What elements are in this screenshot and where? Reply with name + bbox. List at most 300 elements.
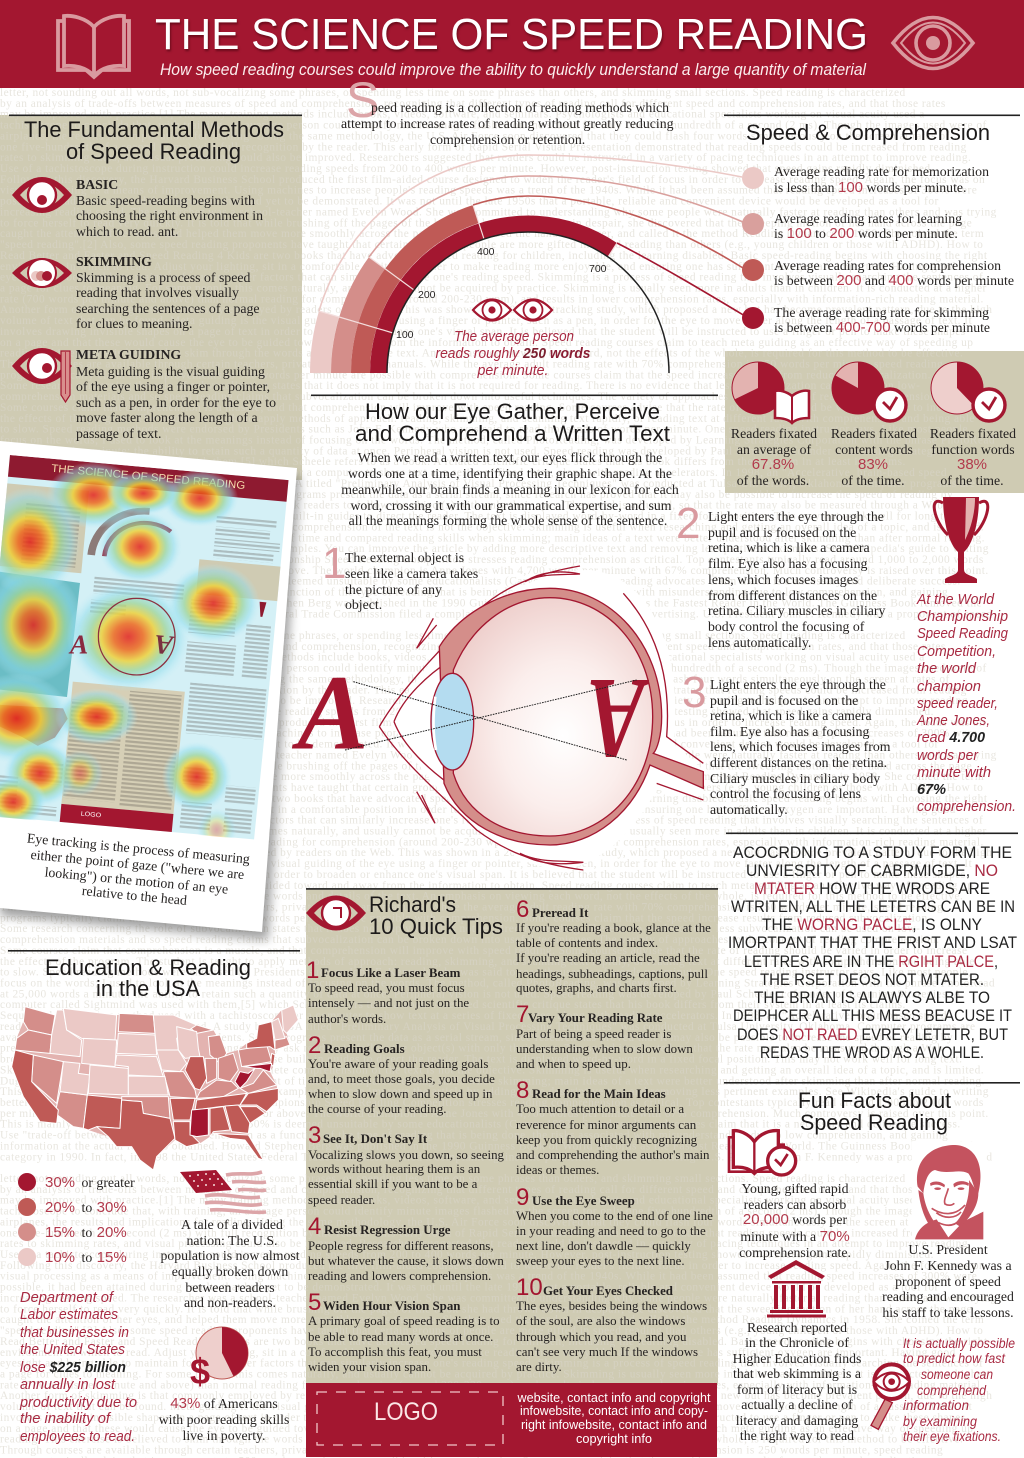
tip 8: ideas or themes. bbox=[516, 1163, 599, 1177]
step 3: retina, which is like a camera bbox=[710, 708, 872, 723]
text: skimming: The average reading rate for skimming bbox=[774, 305, 989, 320]
chart: pie 43 percent with dollar bbox=[190, 1327, 248, 1392]
text: JFK: proponent of speed bbox=[895, 1274, 1001, 1289]
dot: learning bbox=[742, 213, 764, 235]
tip 6: table of contents and index. bbox=[516, 936, 658, 950]
callout: labor estimates: that businesses in bbox=[20, 1324, 129, 1341]
tip 6: headings, subheadings, captions, pull bbox=[516, 967, 708, 981]
text: content words: 83% bbox=[858, 456, 888, 473]
panel: jumbled text: THE BRIAN IS ALAWYS ALBE TO bbox=[754, 989, 990, 1007]
panel: education and reading bbox=[8, 950, 300, 1445]
method: basic: choosing the right environment in bbox=[76, 208, 263, 223]
step 2: lens automatically. bbox=[708, 635, 811, 650]
text: research reported: that web skimming is a bbox=[733, 1366, 861, 1381]
icon: tips eye bbox=[306, 896, 366, 930]
panel: jumbled text: DOES NOT RAED EVREY LETETR, BUT bbox=[737, 1026, 1008, 1044]
tip 8: Too much attention to detail or a bbox=[516, 1102, 684, 1116]
title: THE SCIENCE OF SPEED READING bbox=[155, 10, 868, 59]
tip 1: author's words. bbox=[308, 1012, 386, 1026]
step 3 bbox=[682, 668, 891, 817]
method: skimming: searching the sentences of a page bbox=[76, 301, 260, 316]
panel: jumbled text: ACOCRDNIG TO A STDUY FORM THE bbox=[733, 844, 1012, 862]
step 3: different distances on the retina. bbox=[710, 755, 887, 770]
text: research reported: literacy and damaging bbox=[736, 1413, 858, 1428]
callout: eye fixations: comprehend bbox=[917, 1382, 987, 1398]
method: skimming: for clues to meaning. bbox=[76, 316, 192, 331]
tip 1 bbox=[306, 957, 469, 1026]
tip 5 bbox=[308, 1289, 500, 1374]
panel: reader fixations background bbox=[725, 351, 1024, 493]
text: americans in poverty: with poor reading skills bbox=[159, 1412, 289, 1427]
text: average of words: 67.8% bbox=[752, 456, 794, 473]
text: function words: Readers fixated bbox=[930, 426, 1016, 441]
text: JFK: reading and encouraged bbox=[882, 1289, 1014, 1304]
callout: world championship: speed reader, bbox=[917, 695, 998, 712]
tip 5: widen your vision span. bbox=[308, 1360, 431, 1374]
callout: labor estimates: lose $225 billion bbox=[20, 1359, 126, 1376]
callout: world championship: minute with bbox=[917, 764, 991, 781]
mini infographic with heat map: THE SCIENCE OF SPEED READING bbox=[51, 463, 246, 492]
tip 9: Use the Eye Sweep bbox=[532, 1194, 635, 1208]
text: gifted readers: Young, gifted rapid bbox=[741, 1181, 849, 1196]
chart: pie 67.8 percent with book bbox=[732, 362, 809, 423]
tip 2: Reading Goals bbox=[324, 1042, 405, 1056]
text: comprehension: Average reading rates for comprehension bbox=[774, 258, 1001, 273]
text: learning bbox=[774, 211, 962, 242]
inverted letter A image: A bbox=[587, 654, 650, 782]
text: divided nation: population is now almost bbox=[160, 1248, 300, 1263]
text: JFK: U.S. President bbox=[908, 1242, 988, 1257]
text: divided nation: equally broken down bbox=[172, 1264, 288, 1279]
callout: world championship: Championship bbox=[917, 608, 1008, 625]
panel: tips background bbox=[306, 889, 718, 1385]
diagram: human eye bbox=[291, 566, 703, 870]
method: skimming: reading that involves visually bbox=[76, 285, 239, 300]
tip 3 bbox=[308, 1122, 505, 1207]
text: americans in poverty: live in poverty. bbox=[182, 1428, 266, 1443]
text: JFK: John F. Kennedy was a bbox=[884, 1258, 1012, 1273]
legend: 15% to 20% bbox=[45, 1224, 127, 1241]
tip 3: words without hearing them is an bbox=[308, 1162, 481, 1176]
chart: reading speed gauge bbox=[310, 155, 745, 379]
icon: eye bbox=[893, 18, 973, 68]
caption: Eye tracking is the process of measuring bbox=[26, 831, 251, 867]
method: skimming: Skimming is a process of speed bbox=[76, 270, 250, 285]
step 3: pupil and is focused on the bbox=[710, 693, 858, 708]
text: content words: of the time. bbox=[841, 473, 905, 488]
icon: skimming eye bbox=[12, 258, 72, 288]
heading: and Comprehend a Written Text bbox=[355, 421, 671, 446]
caption bbox=[26, 831, 251, 908]
gauge labels: 200 bbox=[418, 289, 436, 301]
tip 9: When you come to the end of one line bbox=[516, 1209, 713, 1223]
callout: labor estimates: the inability of bbox=[20, 1410, 112, 1427]
step 2: pupil and is focused on the bbox=[708, 525, 856, 540]
method: skimming: SKIMMING bbox=[76, 254, 152, 269]
text: average of words: an average of bbox=[737, 442, 812, 457]
callout: eye fixations: someone can bbox=[921, 1366, 993, 1382]
heading: of Speed Reading bbox=[66, 139, 241, 164]
tip 5: Widen Hour Vision Span bbox=[323, 1299, 460, 1313]
tip 5: A primary goal of speed reading is to bbox=[308, 1314, 500, 1328]
contact text: right infowebsite, contact info and bbox=[521, 1418, 707, 1432]
chart: pie 38 percent with check bbox=[931, 362, 1005, 421]
tip 2: and, to meet those goals, you decide bbox=[308, 1072, 495, 1086]
tip 6: Preread It bbox=[532, 906, 589, 920]
intro text block: peed reading is a collection of reading methods which bbox=[371, 100, 669, 115]
light rays bbox=[345, 680, 637, 760]
gauge labels: 700 bbox=[589, 263, 607, 275]
tip 3: Vocalizing slows you down, so seeing bbox=[308, 1148, 505, 1162]
step 3: Ciliary muscles in ciliary body bbox=[710, 771, 880, 786]
mini eye letters: A bbox=[68, 629, 88, 659]
text: learning: Average reading rates for learning bbox=[774, 211, 962, 226]
letter A object: A bbox=[291, 654, 368, 772]
tip 9: next line, don't dawdle — quickly bbox=[516, 1239, 691, 1253]
heading: Education & Reading bbox=[45, 955, 251, 980]
heading: Speed & Comprehension bbox=[746, 120, 990, 145]
step 2 bbox=[676, 499, 885, 650]
text: gifted readers: readers can absorb bbox=[744, 1197, 846, 1212]
tip 10: through which you read, and you bbox=[516, 1330, 687, 1344]
tip 2: 2 bbox=[308, 1032, 321, 1059]
dot: memorization bbox=[742, 167, 764, 189]
tip 3: 3 bbox=[308, 1122, 321, 1149]
step 2: lens, which focuses images bbox=[708, 572, 858, 587]
tip 10: can't see very much If the windows bbox=[516, 1345, 698, 1359]
heading bbox=[24, 117, 284, 164]
step 2: 2 bbox=[676, 499, 700, 548]
eyelid top bbox=[379, 566, 580, 727]
heading: 10 Quick Tips bbox=[369, 914, 503, 939]
mini eye letters bbox=[68, 598, 176, 675]
step 2: from different distances on the bbox=[708, 588, 877, 603]
icon: pair of eyes bbox=[473, 300, 552, 320]
tip 1: intensely — and not just on the bbox=[308, 996, 469, 1010]
tip 5: be able to read many words at once. bbox=[308, 1330, 493, 1344]
legend: 10% to 15% bbox=[45, 1249, 127, 1266]
intro text block: attempt to increase rates of reading without greatly reducing bbox=[341, 116, 674, 131]
contact text: infowebsite, contact info and copy- bbox=[520, 1404, 708, 1418]
heading: Richard's bbox=[369, 892, 456, 917]
tip 5: To accomplish this feat, you must bbox=[308, 1345, 482, 1359]
tip 10: 10 bbox=[516, 1274, 543, 1301]
callout: average person: The average person bbox=[454, 328, 574, 345]
text: JFK: his staff to take lessons. bbox=[882, 1305, 1014, 1320]
mini eye letters: A bbox=[153, 629, 176, 661]
intro text block bbox=[341, 72, 674, 147]
tip 4: reading and lowers comprehension. bbox=[308, 1269, 491, 1283]
callout: average person: reads roughly 250 words bbox=[436, 345, 590, 362]
heading: The Fundamental Methods bbox=[24, 117, 284, 142]
chart: pie 43 percent with dollar: $ bbox=[190, 1351, 210, 1392]
callout: world championship: Speed Reading bbox=[917, 625, 1009, 642]
heading bbox=[45, 955, 251, 1001]
tip 8: 8 bbox=[516, 1077, 529, 1104]
step 3: lens, which focuses images from bbox=[710, 739, 891, 754]
tip 7: Vary Your Reading Rate bbox=[528, 1011, 663, 1025]
subtitle: How speed reading courses could improve the ability to quickly understand a large quantity of material bbox=[160, 60, 867, 79]
text: research reported: form of literacy but is bbox=[737, 1382, 857, 1397]
text: research reported: the right way to read bbox=[740, 1428, 854, 1443]
panel: jumbled text: REDAS THE WROD AS A WOHLE. bbox=[760, 1044, 984, 1062]
tip 8: Read for the Main Ideas bbox=[532, 1087, 666, 1101]
contact text: copyright info bbox=[576, 1432, 652, 1446]
step 1 bbox=[322, 539, 478, 612]
contact text bbox=[516, 1391, 711, 1446]
panel: jumbled text: UNVIESRITY OF CABRMIGDE, NO bbox=[746, 862, 998, 880]
tip 9: in your reading and need to go to the bbox=[516, 1224, 706, 1238]
tip 5: 5 bbox=[308, 1289, 321, 1316]
caption: looking") or the motion of an eye bbox=[44, 864, 229, 898]
step 2: Light enters the eye through the bbox=[708, 509, 884, 524]
tip 1: To speed read, you must focus bbox=[308, 981, 465, 995]
panel: fun facts bbox=[724, 1082, 1020, 1444]
icon: John F. Kennedy portrait bbox=[912, 1142, 987, 1240]
eyelid bottom bbox=[379, 727, 583, 870]
text: gifted readers bbox=[739, 1181, 851, 1260]
intro text block: S bbox=[346, 72, 379, 128]
panel: eye tracking poster bbox=[0, 441, 300, 940]
section: how our eye gathers bbox=[311, 394, 718, 612]
tip 2: the course of your reading. bbox=[308, 1102, 447, 1116]
callout: world championship bbox=[916, 591, 1016, 815]
text: divided nation: and non-readers. bbox=[184, 1295, 276, 1310]
text: content words: content words bbox=[835, 442, 913, 457]
callout: world championship: At the World bbox=[916, 591, 995, 608]
step 3: Light enters the eye through the bbox=[710, 677, 886, 692]
step 1: The external object is bbox=[345, 550, 464, 565]
callout: world championship: words per bbox=[917, 747, 979, 764]
tip 10: The eyes, besides being the windows bbox=[516, 1299, 707, 1313]
text: content words bbox=[831, 426, 917, 488]
tip 3: See It, Don't Say It bbox=[323, 1132, 428, 1146]
text: learning: is 100 to 200 words per minute. bbox=[774, 225, 958, 242]
text: divided nation bbox=[160, 1217, 300, 1310]
text: memorization bbox=[774, 164, 989, 196]
tip 7: 7 bbox=[516, 1001, 529, 1028]
text: intro paragraph: words one at a time, identifying their graphic shape. At the bbox=[348, 466, 672, 481]
method: meta guiding: of the eye using a finger or pointer, bbox=[76, 379, 270, 394]
callout: world championship: Anne Jones, bbox=[916, 712, 990, 729]
text: divided nation: A tale of a divided bbox=[181, 1217, 283, 1232]
text: comprehension bbox=[774, 258, 1014, 289]
legend: 30% or greater bbox=[45, 1174, 135, 1191]
tip 3: essential skill if you want to be a bbox=[308, 1177, 478, 1191]
text: gifted readers: comprehension rate. bbox=[739, 1245, 851, 1260]
callout: world championship: the world bbox=[917, 660, 977, 677]
tip 6: If you're reading an article, read the bbox=[516, 951, 700, 965]
callout: eye fixations: information bbox=[903, 1397, 969, 1413]
footer: logo and contact bbox=[306, 1383, 717, 1457]
tip 9: sweep your eyes to the next line. bbox=[516, 1254, 685, 1268]
panel: methods background bbox=[0, 115, 302, 480]
callout: eye fixations: to predict how fast bbox=[903, 1350, 1006, 1366]
method: meta guiding: move faster along the length of a bbox=[76, 410, 258, 425]
step 1: seen like a camera takes bbox=[345, 566, 478, 581]
callout: labor estimates: Department of bbox=[20, 1289, 115, 1306]
heat map blobs bbox=[0, 462, 260, 852]
tip 4: People regress for different reasons, bbox=[308, 1239, 494, 1253]
intro text block: comprehension or retention. bbox=[430, 132, 585, 147]
panel: reader fixations bbox=[731, 362, 1016, 488]
tip 6: If you're reading a book, glance at the bbox=[516, 921, 711, 935]
map: USA states bbox=[12, 1005, 298, 1170]
text: content words: Readers fixated bbox=[831, 426, 917, 441]
tip 6: 6 bbox=[516, 896, 529, 923]
callout: eye fixations: their eye fixations. bbox=[903, 1428, 1001, 1444]
step 2: retina, which is like a camera bbox=[708, 540, 870, 555]
tip 1: 1 bbox=[306, 957, 319, 984]
callout: world championship: Competition, bbox=[917, 643, 996, 660]
tip 9: 9 bbox=[516, 1184, 529, 1211]
text: research reported bbox=[733, 1320, 861, 1443]
text: research reported: actually a decline of bbox=[741, 1397, 853, 1412]
text: function words: 38% bbox=[957, 456, 987, 473]
text: americans in poverty bbox=[159, 1395, 289, 1443]
method: basic: which to read. ant. bbox=[76, 224, 178, 239]
panel: fundamental methods bbox=[9, 114, 302, 441]
text: intro paragraph: meanwhile, our brain finds a meaning in our lexicon for each bbox=[341, 482, 679, 497]
callout: world championship: read 4.700 bbox=[917, 729, 986, 746]
panel: jumbled text: THE RSET DEOS NOT MTATER. bbox=[760, 971, 984, 989]
mini infographic with heat map: LOGO bbox=[80, 811, 101, 819]
panel: jumbled text: LETTRES ARE IN THE RGIHT PALCE, bbox=[744, 953, 998, 971]
callout: world championship: champion bbox=[917, 678, 981, 695]
text: research reported: Higher Education finds bbox=[733, 1351, 861, 1366]
tip 8 bbox=[516, 1077, 710, 1177]
gauge labels bbox=[396, 246, 607, 341]
method: basic: Basic speed-reading begins with bbox=[76, 193, 255, 208]
method: meta guiding: META GUIDING bbox=[76, 347, 181, 362]
header banner bbox=[0, 0, 1024, 88]
panel: jumbled text bbox=[726, 832, 1018, 1062]
nested mini poster bbox=[0, 571, 80, 697]
tip 10 bbox=[516, 1274, 707, 1374]
callout: labor estimates: employees to read. bbox=[20, 1428, 135, 1445]
text: average of words bbox=[731, 426, 817, 488]
callout: labor estimates: Labor estimates bbox=[20, 1306, 118, 1323]
callout: labor estimates: productivity due to bbox=[19, 1394, 137, 1411]
text: divided nation: between readers bbox=[185, 1280, 275, 1295]
text: skimming: is between 400-700 words per minute bbox=[774, 319, 990, 336]
text: intro paragraph bbox=[341, 450, 679, 528]
callout: eye fixations bbox=[903, 1335, 1015, 1444]
gauge labels: 100 bbox=[396, 329, 414, 341]
text: americans in poverty: 43% of Americans bbox=[170, 1395, 278, 1412]
text: function words bbox=[930, 426, 1016, 488]
tip 8: keep you from quickly recognizing bbox=[516, 1133, 698, 1147]
text: memorization: is less than 100 words per minute. bbox=[774, 179, 966, 196]
step 2: body control the focusing of bbox=[708, 619, 865, 634]
text: average of words: of the words. bbox=[737, 473, 809, 488]
step 3: film. Eye also has a focusing bbox=[710, 724, 869, 739]
panel: quick tips bbox=[306, 888, 718, 1374]
heading bbox=[798, 1088, 952, 1135]
icon: basic eye bbox=[12, 177, 72, 213]
step 1: object. bbox=[345, 597, 382, 612]
lens bbox=[431, 673, 474, 770]
icon: trophy bbox=[934, 497, 988, 583]
callout: average person: per minute. bbox=[477, 362, 548, 379]
heading bbox=[369, 892, 503, 939]
method: meta guiding bbox=[76, 347, 276, 441]
text: JFK bbox=[882, 1242, 1014, 1320]
method: meta guiding: passage of text. bbox=[76, 426, 161, 441]
callout: average person bbox=[436, 328, 590, 379]
callout: world championship: 67% bbox=[917, 781, 946, 798]
callout: eye fixations: by examining bbox=[903, 1413, 977, 1429]
panel: speed and comprehension bbox=[724, 114, 1020, 336]
tip 10: are dirty. bbox=[516, 1360, 562, 1374]
text: intro paragraph: word, crossing it with our grammatical expertise, and sum bbox=[350, 498, 672, 513]
step 1: 1 bbox=[322, 539, 346, 588]
text: skimming bbox=[774, 305, 990, 336]
gauge labels: 400 bbox=[477, 246, 495, 258]
method: skimming bbox=[76, 254, 260, 331]
tip 6: quotes, graphs, and charts first. bbox=[516, 981, 677, 995]
caption: either the point of gaze ("where we are bbox=[30, 847, 245, 883]
heading bbox=[355, 399, 671, 446]
icon: open book bbox=[58, 16, 129, 77]
step 3: 3 bbox=[682, 668, 706, 717]
tip 4: 4 bbox=[308, 1213, 321, 1240]
mini infographic with heat map bbox=[0, 453, 289, 852]
text: gifted readers: 20,000 words per bbox=[743, 1211, 847, 1228]
tip 7: understanding when to slow down bbox=[516, 1042, 693, 1056]
logo: LOGO bbox=[374, 1398, 438, 1426]
tip 10: of the soul, are also the windows bbox=[516, 1314, 685, 1328]
tip 7 bbox=[516, 1001, 693, 1071]
step 3: control the focusing of lens bbox=[710, 786, 861, 801]
tip 8: and comprehending the author's main bbox=[516, 1148, 710, 1162]
text: divided nation: nation: The U.S. bbox=[187, 1233, 277, 1248]
text: comprehension: is between 200 and 400 words per minute bbox=[774, 272, 1014, 289]
text: research reported: Research reported bbox=[747, 1320, 847, 1335]
step 2: film. Eye also has a focusing bbox=[708, 556, 867, 571]
text: average of words: Readers fixated bbox=[731, 426, 817, 441]
method: meta guiding: such as a pen, in order for the eye to bbox=[76, 395, 276, 410]
method: basic bbox=[76, 177, 263, 239]
tip 2 bbox=[308, 1032, 495, 1116]
text: gifted readers: minute with a 70% bbox=[740, 1228, 850, 1245]
panel: jumbled text: MTATER HOW THE WRODS ARE bbox=[754, 880, 990, 898]
step 2: retina. Ciliary muscles in ciliary bbox=[708, 603, 885, 618]
heading: Fun Facts about bbox=[798, 1088, 952, 1113]
tip 4: Resist Regression Urge bbox=[324, 1223, 451, 1237]
tip 2: when to slow down and speed up in bbox=[308, 1087, 493, 1101]
callout: labor estimates: the United States bbox=[20, 1341, 125, 1358]
caption: relative to the head bbox=[81, 883, 188, 908]
text: memorization: Average reading rate for memorization bbox=[774, 164, 989, 179]
tip 10: Get Your Eyes Checked bbox=[543, 1284, 674, 1298]
text: intro paragraph: When we read a written text, our eyes flick through the bbox=[358, 450, 662, 465]
icon: book with clock bbox=[729, 1131, 796, 1175]
method: basic: BASIC bbox=[76, 177, 118, 192]
tip 6 bbox=[516, 896, 711, 995]
text: research reported: in the Chronicle of bbox=[745, 1335, 849, 1350]
tip 1: Focus Like a Laser Beam bbox=[321, 966, 461, 980]
callout: world championship: comprehension. bbox=[917, 798, 1016, 815]
icon: american flag bbox=[180, 1170, 266, 1212]
callout: labor estimates: annually in lost bbox=[20, 1376, 116, 1393]
icon: meta guiding eye with pencil bbox=[12, 348, 72, 402]
heading: in the USA bbox=[96, 976, 200, 1001]
dot: comprehension bbox=[742, 259, 764, 281]
text: function words: of the time. bbox=[940, 473, 1004, 488]
callout: labor estimates bbox=[19, 1289, 137, 1445]
tip 4 bbox=[308, 1213, 504, 1283]
